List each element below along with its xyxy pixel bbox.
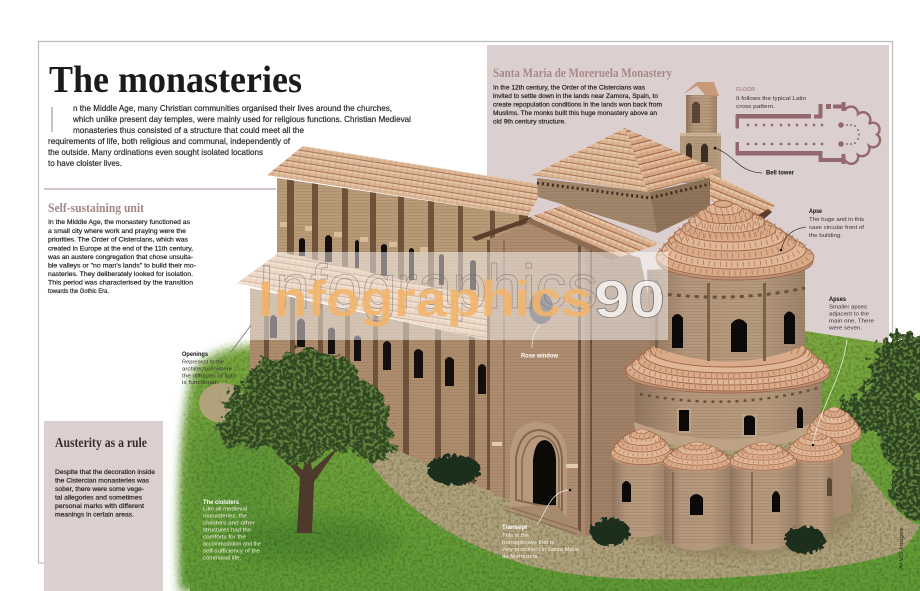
floor plan diagram — [736, 87, 880, 164]
panel text: Santa Maria de Moreruela Monastery: In the 12th century, the Order of the Cistercians was — [493, 84, 646, 92]
label: Apse — [780, 209, 864, 251]
intro text block: requirements of life, both religious and communal, independently of — [48, 136, 291, 146]
panel text: Santa Maria de Moreruela Monastery: Santa Maria de Moreruela Monastery — [493, 66, 673, 80]
label: Rose window: Rose window — [521, 354, 558, 360]
intro text block: to have cloister lives. — [48, 158, 122, 168]
label: Transept: Transept — [502, 525, 527, 531]
upper nave roof — [267, 146, 545, 216]
intro text block — [48, 103, 411, 168]
label: Openings: is functional. — [182, 380, 218, 386]
label: Transept: very prominent in Santa Maria — [502, 547, 580, 553]
label: Transept — [502, 489, 580, 560]
label: Apse: case circular front of — [809, 225, 864, 231]
watermark: Infographics — [258, 253, 598, 322]
label: Apses: main one. There — [829, 318, 874, 324]
panel: Austerity as a rule: tal allegories and sometimes — [55, 494, 143, 502]
section: Self-sustaining unit: nasteries. They deliberately looked for isolation. — [48, 271, 193, 278]
label: The cloisters: comforts for the — [203, 534, 246, 540]
floor plan diagram: FLOOR — [736, 87, 755, 93]
label: The cloisters — [203, 500, 261, 562]
panel: Austerity as a rule: Despite that the decoration inside — [55, 469, 155, 476]
section: Self-sustaining unit: In the Middle Age, the monastery functioned as — [48, 219, 191, 226]
intro text block: the outside. Many ordinations even sought isolated locations — [48, 147, 263, 157]
label: Apse: Apse — [809, 209, 823, 215]
label: Apse: the building. — [809, 233, 842, 239]
central tower — [532, 128, 722, 233]
label: Transept: de Moreruela. — [502, 554, 539, 560]
label: The cloisters: accommodation and the — [203, 542, 261, 548]
image credit: Al VG Images — [899, 527, 905, 569]
label: Openings: Openings — [182, 352, 209, 358]
transept wall — [487, 222, 660, 537]
panel: Austerity as a rule: sober, there were some vege- — [55, 486, 144, 493]
floor plan diagram: cross pattern. — [736, 104, 775, 110]
label: Openings — [182, 325, 251, 386]
rose window — [529, 292, 553, 324]
panel text: Santa Maria de Moreruela Monastery: create repopulation conditions in the lands won back from — [493, 102, 662, 108]
panel: Austerity as a rule: the Cistercian monasteries was — [55, 478, 150, 484]
label: Apses: were seven. — [828, 326, 862, 332]
small apse: centre left — [663, 442, 731, 551]
watermark — [237, 252, 668, 340]
label: Apses: Apses — [829, 297, 847, 303]
section: Self-sustaining unit: Self-sustaining unit — [48, 200, 145, 215]
intro text block: monasteries thus consisted of a structure that could meet all the — [73, 125, 304, 135]
label: The cloisters: communal life. — [203, 556, 241, 562]
label: Apse: The huge and in this — [809, 217, 864, 223]
panel text: Santa Maria de Moreruela Monastery — [493, 66, 673, 126]
landscape: grass — [177, 331, 920, 591]
label: The cloisters: Like all medieval — [203, 506, 247, 512]
label: Openings: Represent to the — [182, 360, 224, 366]
section: Self-sustaining unit: This period was characterised by the transition — [48, 280, 193, 286]
section: Self-sustaining unit: created in Europe at the end of the 11th century, — [48, 246, 193, 252]
middle apse roof — [626, 333, 830, 393]
label: The cloisters: cloisters and other — [203, 520, 255, 526]
watermark: Infographics — [258, 271, 592, 327]
section: Self-sustaining unit: was an austere congregation that chose unsuita- — [47, 254, 193, 261]
label: Bell tower — [714, 147, 795, 176]
transept roof — [472, 204, 660, 260]
label: Transept: transept/nave that is — [502, 540, 554, 546]
label: The cloisters: self-sufficiency of the — [203, 548, 260, 554]
section: Self-sustaining unit: ble valleys or "no man's lands" to build their mo- — [48, 262, 196, 270]
transept portal — [492, 422, 585, 537]
left fade of the landscape — [163, 330, 183, 591]
small apse: centre right — [729, 442, 797, 551]
middle apse drum — [634, 370, 822, 451]
intro text block: n the Middle Age, many Christian communities organised their lives around the churches, — [73, 103, 392, 113]
panel: Santa Maria background — [487, 45, 889, 350]
section: Self-sustaining unit — [47, 200, 196, 295]
bell tower — [680, 82, 721, 183]
watermark: 90 — [594, 271, 665, 329]
bushes — [427, 455, 825, 554]
title: The monasteries — [49, 59, 302, 101]
building: monastery — [237, 82, 861, 551]
upper nave wall — [277, 178, 528, 299]
aisle wall — [250, 280, 487, 500]
panel: Austerity as a rule: Austerity as a rule — [55, 436, 147, 451]
panel text: Santa Maria de Moreruela Monastery: Muslims. The monks built this huge monastery above an — [493, 110, 657, 117]
label: Apses: adjacent to the — [829, 312, 869, 318]
panel: Austerity as a rule — [44, 421, 163, 591]
upper apse drum — [647, 262, 805, 362]
panel: Austerity as a rule: personal marks with different — [55, 503, 144, 510]
section: Self-sustaining unit: a small city where work and praying were the — [48, 228, 186, 235]
label: Rose window — [521, 325, 558, 360]
label: Openings: architecture where — [182, 366, 232, 372]
panel: Austerity as a rule: meanings in certain areas. — [55, 512, 134, 518]
small apse: left — [611, 429, 673, 538]
label: Transept: This is the — [502, 533, 529, 539]
aisle roof — [237, 252, 490, 340]
label: Openings: the diffusion of light — [182, 374, 236, 380]
landscape: dirt path — [199, 383, 920, 579]
label: The cloisters: structures had the — [203, 528, 251, 534]
intro text block: which unlike present day temples, were mainly used for religious functions. Christian Medieval — [72, 114, 411, 124]
left tree — [218, 349, 395, 534]
section: Self-sustaining unit: priorities. The Order of Cistercians, which was — [48, 236, 189, 244]
label: The cloisters: The cloisters — [203, 500, 240, 506]
divider rule — [44, 188, 276, 190]
small apses — [611, 407, 861, 551]
small apse: far right — [807, 407, 861, 517]
label: Bell tower: Bell tower — [766, 170, 795, 176]
panel text: Santa Maria de Moreruela Monastery: invited to settle down in the lands near Zamora, Spain, to — [493, 93, 658, 100]
rear roof — [700, 170, 775, 220]
label: Apses: Smaller apses — [829, 304, 867, 310]
main apse roof — [656, 200, 814, 280]
floor plan diagram: It follows the typical Latin — [736, 96, 806, 102]
label: The cloisters: monasteries, the — [203, 514, 247, 520]
small apse: right — [786, 432, 844, 537]
right tree — [840, 334, 920, 518]
section: Self-sustaining unit: towards the Gothic Era. — [48, 288, 109, 295]
panel text: Santa Maria de Moreruela Monastery: old 9th century structure. — [493, 118, 566, 126]
label: Apses — [812, 297, 874, 446]
